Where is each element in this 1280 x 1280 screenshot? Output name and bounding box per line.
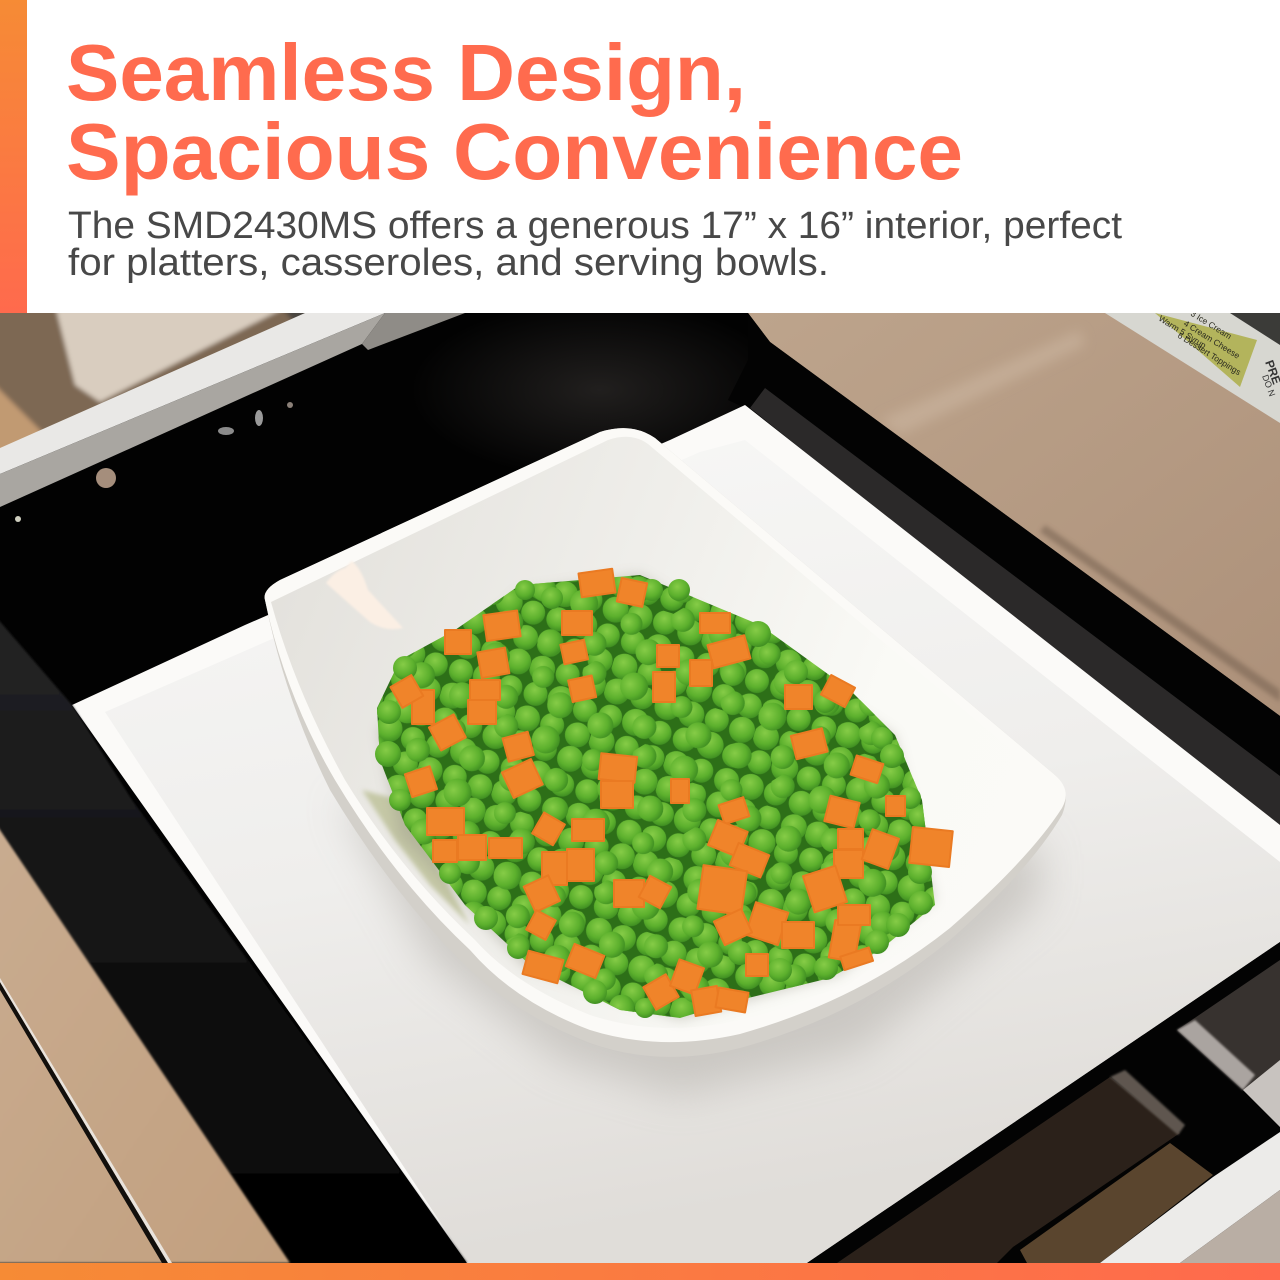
green-tinted food reflection [362, 790, 470, 925]
description text: for platters, casseroles, and serving bowls. [68, 242, 829, 284]
interior dark upper shade [460, 324, 738, 452]
sheet inner plate [106, 568, 1280, 1263]
panel seam [0, 978, 172, 1263]
white bowl [265, 428, 1066, 1057]
control label sticker: 6 Dessert Toppings [1176, 330, 1243, 377]
food shadow [378, 574, 935, 1020]
bowl inner [271, 437, 766, 1010]
title: Seamless Design, [66, 28, 746, 117]
bowl rim [265, 428, 1066, 1042]
bowl glare [326, 561, 403, 629]
printed smudge on cardboard [1040, 525, 1280, 702]
left accent strip [0, 0, 27, 313]
light streak on cardboard [880, 330, 1085, 435]
control label sticker [1105, 308, 1280, 423]
description text: The SMD2430MS offers a generous 17” x 16” interior, perfect [68, 205, 1122, 247]
tan left-bottom panel [0, 815, 290, 1263]
control label sticker: DO N [1260, 373, 1277, 398]
bottom accent strip [0, 1263, 1280, 1280]
border peas [375, 579, 933, 1018]
bowl underside [265, 428, 1066, 1057]
screw details [15, 402, 293, 522]
photo: warming drawer with bowl of peas and carrots [0, 300, 1280, 1263]
description text [68, 205, 1122, 284]
white inner sheet [72, 405, 1280, 1263]
title: Spacious Convenience [66, 107, 963, 196]
peas mass [377, 575, 935, 1018]
control label sticker: Warm 5 Syrup [1157, 313, 1208, 350]
control label sticker: 3 Ice Cream [1189, 308, 1234, 341]
header panel [0, 0, 1280, 313]
black left rail [0, 610, 467, 1263]
carrots [390, 569, 953, 1016]
drawer interior background [0, 313, 1280, 1263]
title [66, 28, 963, 196]
top left floor and cabinet [0, 313, 305, 448]
control label sticker: 4 Cream Cheese [1182, 318, 1242, 361]
drawer silver front edge [0, 313, 465, 507]
bowl shadow [340, 800, 1040, 1095]
bottom right drawer parts [807, 942, 1280, 1263]
tan cardboard right area [748, 313, 1280, 716]
black right rail [728, 313, 1280, 832]
